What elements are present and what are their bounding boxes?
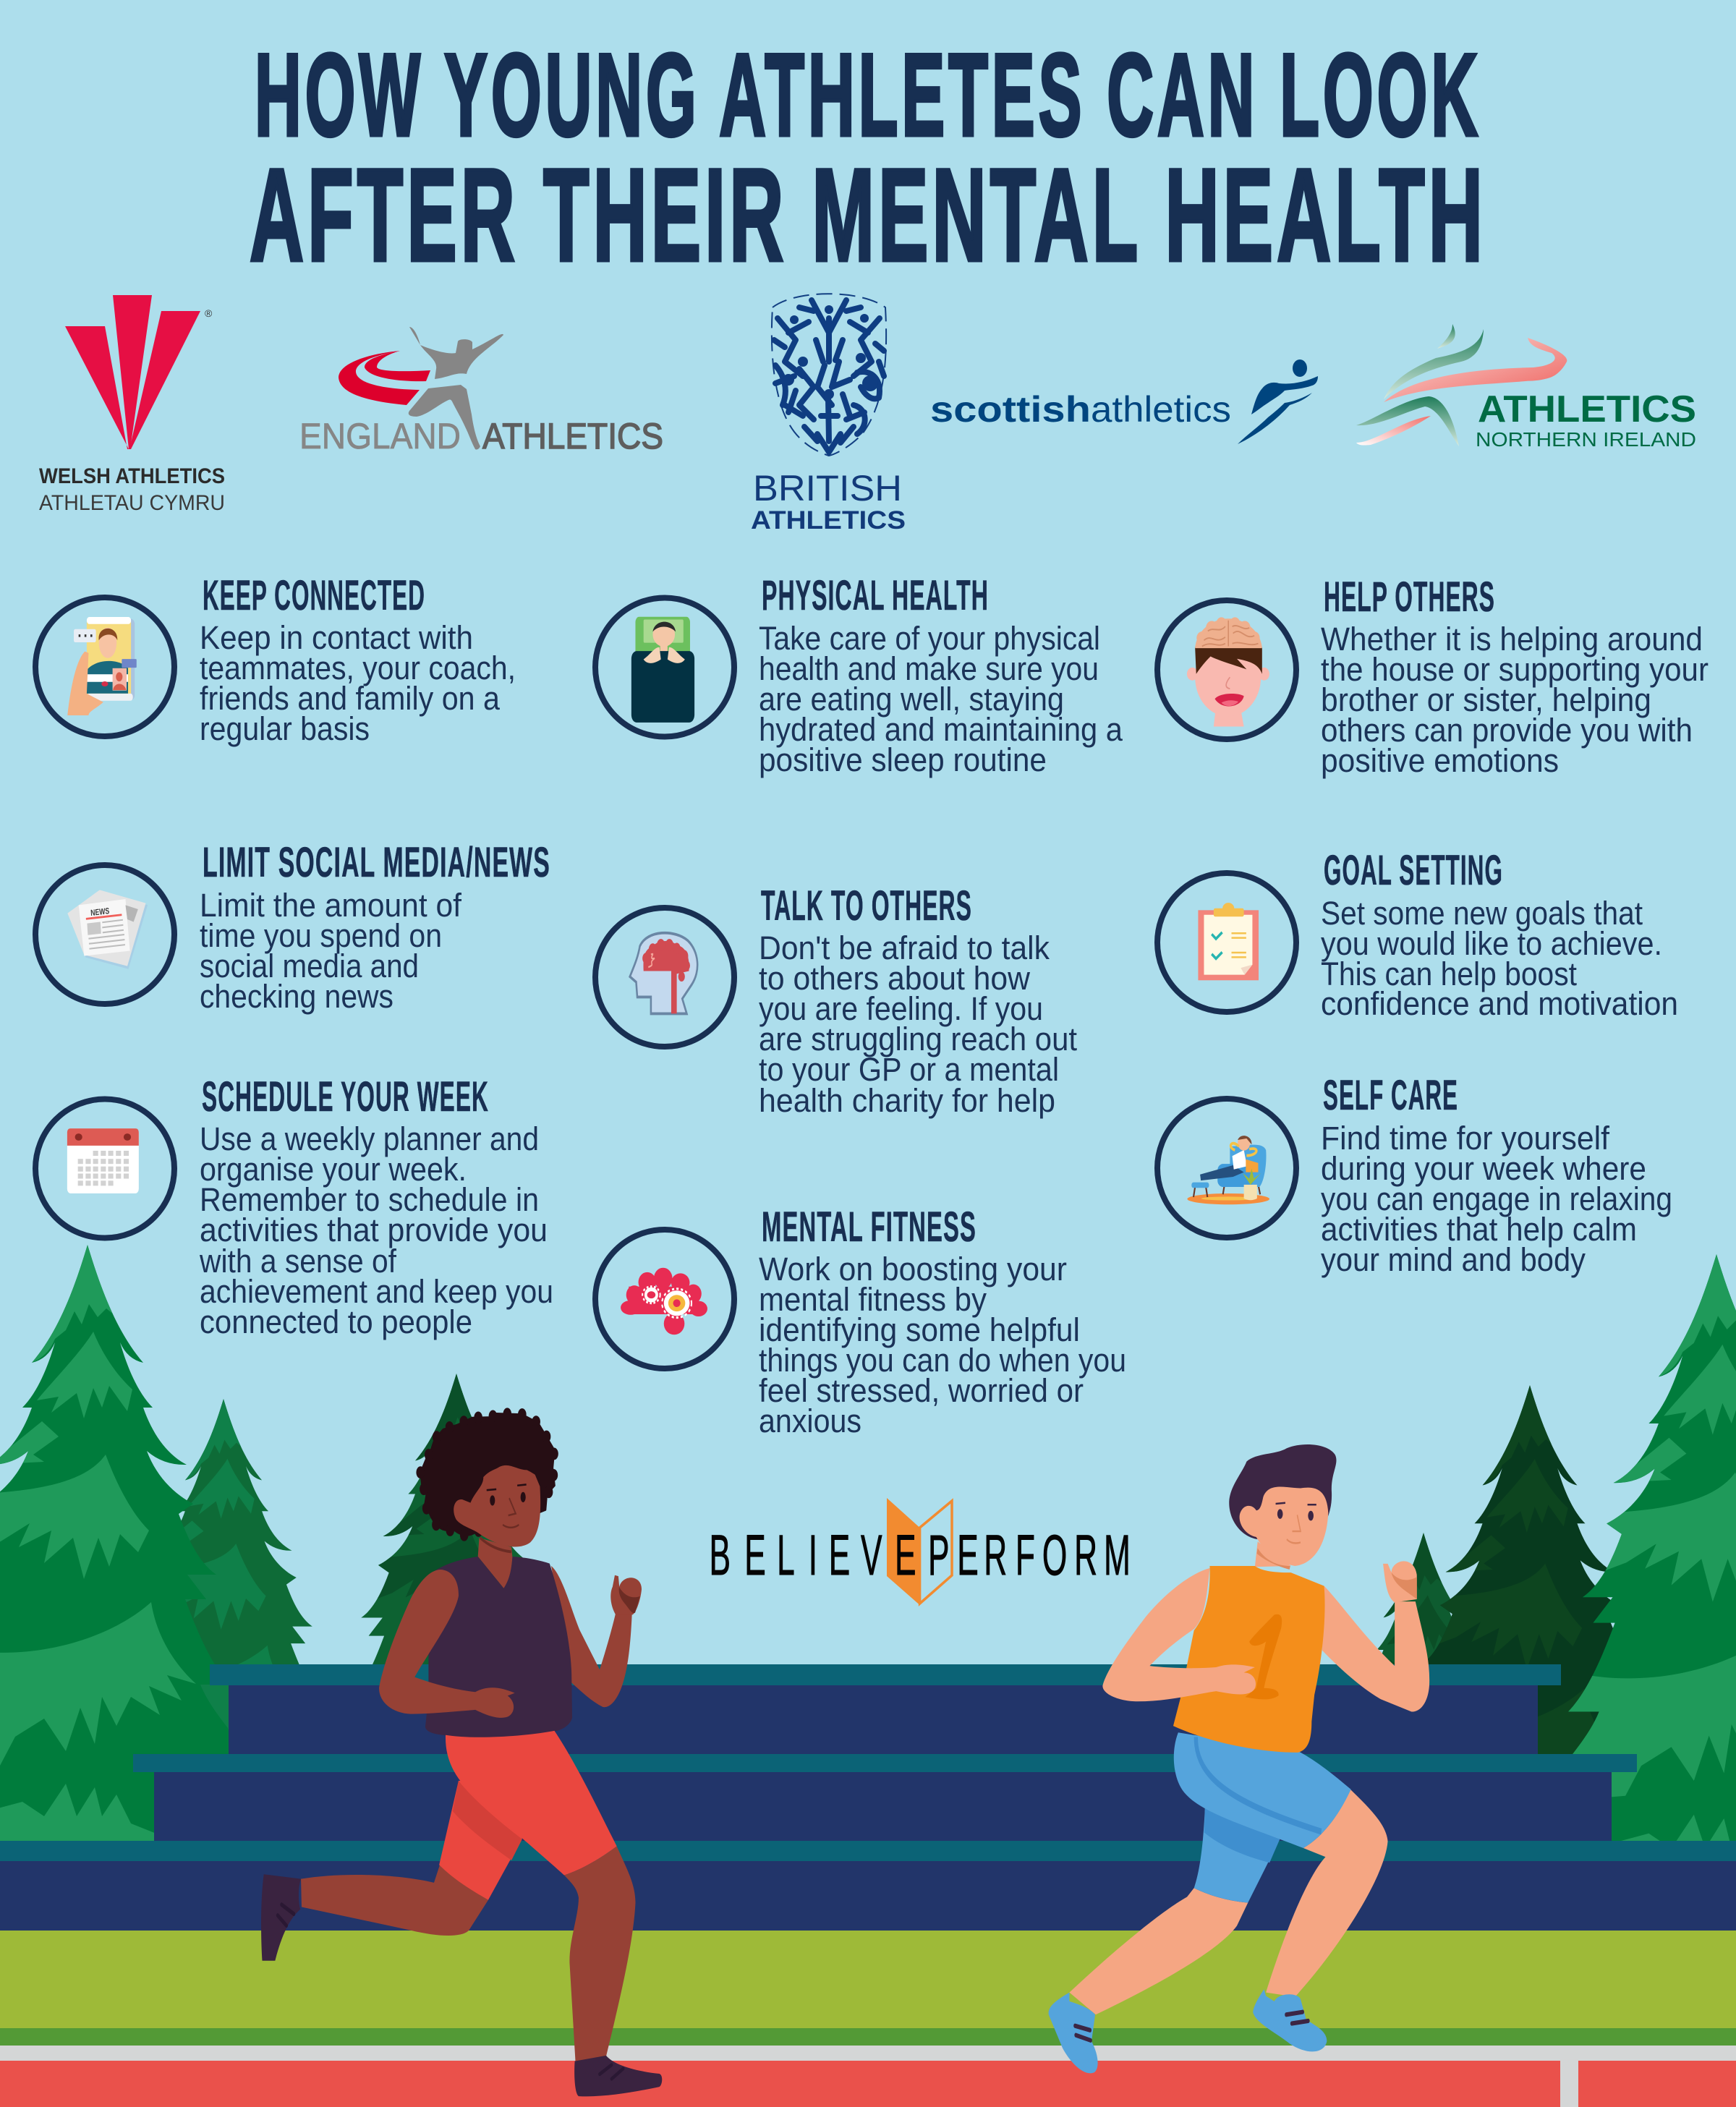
body text: This can help boost: [1321, 955, 1577, 992]
tree: left small: [103, 1399, 341, 1813]
body text: others can provide you with: [1321, 712, 1693, 749]
body text: health charity for help: [759, 1082, 1055, 1119]
tree: right dark: [1382, 1385, 1675, 1895]
logo: Athletics Northern Ireland: NORTHERN IRELAND: [1476, 428, 1696, 451]
body text: [1321, 895, 1678, 1022]
body text: to others about how: [759, 960, 1030, 997]
logo: BelievePerform: BELIEVEPERFORM: [710, 1523, 1131, 1587]
section: physical health: [595, 572, 1123, 778]
body text: things you can do when you: [759, 1342, 1126, 1379]
body text: [1321, 621, 1709, 779]
logo: Welsh Athletics: WELSH ATHLETICS: [39, 464, 225, 488]
body text: teammates, your coach,: [200, 650, 516, 686]
body text: [759, 929, 1077, 1119]
body text: mental fitness by: [759, 1281, 987, 1318]
tree: right small: [1298, 1533, 1546, 1965]
logo: Scottish Athletics: scottish: [930, 389, 1091, 430]
icon: open head with brain: [1157, 600, 1296, 739]
tree: left large: [0, 1245, 258, 1845]
body text: [200, 619, 516, 747]
body text: are struggling reach out: [759, 1021, 1077, 1057]
body text: [1321, 1120, 1672, 1278]
body text: brother or sister, helping: [1321, 681, 1651, 718]
logo: Athletics Northern Ireland: [1356, 324, 1696, 451]
icon: calendar: [35, 1099, 174, 1238]
body text: friends and family on a: [200, 680, 501, 717]
body text: Whether it is helping around: [1321, 621, 1703, 657]
body text: positive emotions: [1321, 742, 1559, 779]
body text: identifying some helpful: [759, 1311, 1080, 1348]
runner: man: [1049, 1444, 1429, 2073]
icon: head with brain: [595, 908, 734, 1047]
grandstand: [0, 1664, 1736, 1931]
icon: sleeping person: [595, 597, 734, 736]
heading: MENTAL FITNESS: [762, 1204, 977, 1251]
heading: KEEP CONNECTED: [203, 572, 425, 619]
body text: Limit the amount of: [200, 887, 461, 924]
icon: person relaxing in chair: [1157, 1099, 1296, 1238]
logo: Welsh Athletics: ATHLETAU CYMRU: [39, 491, 225, 515]
icon: phone video call: [35, 597, 174, 736]
section: mental fitness: [595, 1204, 1126, 1439]
heading: PHYSICAL HEALTH: [762, 572, 989, 619]
logo: Athletics Northern Ireland: ATHLETICS: [1478, 388, 1696, 430]
body text: you are feeling. If you: [759, 990, 1043, 1027]
body text: confidence and motivation: [1321, 985, 1678, 1022]
body text: [199, 1120, 553, 1340]
body text: social media and: [200, 948, 419, 984]
body text: activities that provide you: [200, 1212, 548, 1248]
body text: Don't be afraid to talk: [759, 929, 1050, 966]
body text: positive sleep routine: [759, 741, 1047, 778]
section: keep connected: [35, 572, 516, 747]
body text: health and make sure you: [759, 650, 1099, 687]
logo: England Athletics: ENGLAND: [299, 416, 461, 456]
body text: anxious: [759, 1402, 861, 1439]
body text: Find time for yourself: [1321, 1120, 1609, 1157]
body text: Remember to schedule in: [200, 1181, 539, 1218]
body text: feel stressed, worried or: [759, 1372, 1084, 1409]
logo: Welsh Athletics: [39, 295, 225, 515]
section: talk to others: [595, 882, 1077, 1119]
logo: British Athletics: BRITISH: [753, 468, 902, 508]
section: limit social media: [35, 839, 550, 1015]
body text: regular basis: [200, 710, 370, 747]
body text: to your GP or a mental: [759, 1051, 1059, 1088]
body text: you would like to achieve.: [1321, 925, 1662, 962]
body text: activities that help calm: [1321, 1211, 1637, 1248]
logo: England Athletics: [299, 327, 663, 456]
body text: your mind and body: [1321, 1241, 1586, 1278]
heading: GOAL SETTING: [1324, 847, 1503, 894]
logo: Scottish Athletics: [930, 359, 1318, 444]
body text: [759, 620, 1123, 778]
heading: LIMIT SOCIAL MEDIA/NEWS: [203, 839, 550, 886]
section: help others: [1157, 574, 1709, 779]
logo: England Athletics: ATHLETICS: [482, 416, 663, 456]
body text: achievement and keep you: [200, 1273, 553, 1310]
body text: organise your week.: [200, 1151, 467, 1188]
body text: you can engage in relaxing: [1321, 1180, 1672, 1217]
logo: British Athletics: [751, 294, 906, 535]
body text: hydrated and maintaining a: [759, 711, 1123, 748]
icon: newspaper: [35, 865, 174, 1004]
body text: connected to people: [200, 1303, 472, 1340]
body text: are eating well, staying: [759, 681, 1064, 718]
tree: behind woman: [328, 1374, 582, 1818]
running track: [0, 1931, 1736, 2107]
body text: checking news: [200, 978, 393, 1015]
body text: Work on boosting your: [759, 1251, 1067, 1287]
icon: brain with gears: [595, 1230, 734, 1369]
body text: time you spend on: [200, 917, 442, 954]
icon: newspaper: NEWS: [90, 907, 110, 919]
heading: HELP OTHERS: [1324, 574, 1495, 621]
body text: the house or supporting your: [1321, 651, 1709, 688]
section: schedule your week: [35, 1073, 553, 1340]
body text: [200, 887, 461, 1015]
logo: BelievePerform: [710, 1498, 1131, 1605]
heading: SCHEDULE YOUR WEEK: [202, 1073, 489, 1120]
heading: TALK TO OTHERS: [761, 882, 972, 929]
body text: Take care of your physical: [759, 620, 1100, 657]
icon: clipboard: [1157, 873, 1296, 1012]
body text: during your week where: [1321, 1150, 1646, 1187]
body text: [759, 1251, 1126, 1439]
body text: Use a weekly planner and: [200, 1120, 539, 1157]
body text: Keep in contact with: [200, 619, 473, 656]
logo: Scottish Athletics: athletics: [1091, 389, 1231, 430]
tree: right large: [1536, 1254, 1736, 1878]
heading: SELF CARE: [1323, 1072, 1458, 1119]
logo: Welsh Athletics: ®: [205, 307, 213, 319]
section: goal setting: [1157, 847, 1678, 1022]
body text: Set some new goals that: [1321, 895, 1643, 932]
title: [250, 30, 1486, 289]
logo: British Athletics: ATHLETICS: [751, 506, 906, 535]
section: self care: [1157, 1072, 1672, 1278]
runner: woman: [261, 1413, 662, 2096]
body text: with a sense of: [199, 1243, 396, 1280]
